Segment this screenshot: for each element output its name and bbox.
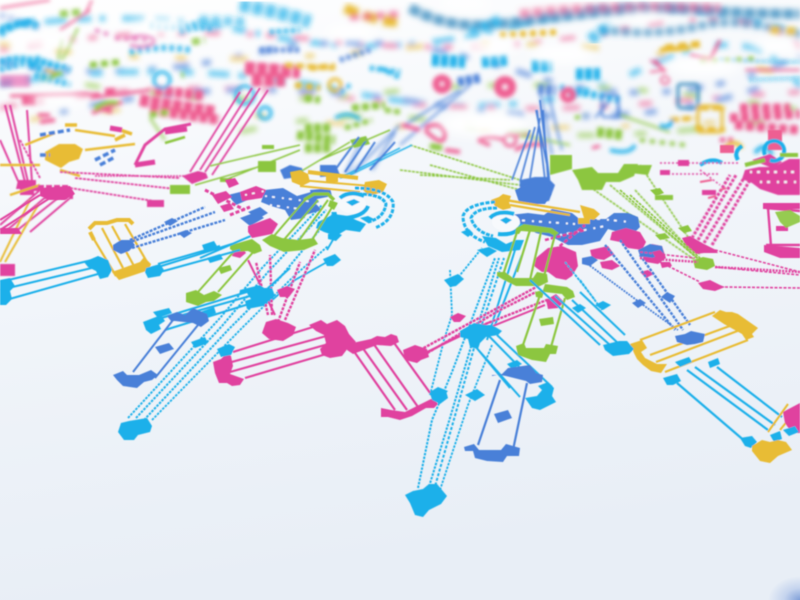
upper mid network, blurred [0, 0, 800, 175]
foreground network [0, 170, 800, 517]
paper shadow at corner [600, 450, 800, 600]
distant network, far blurred band [0, 5, 800, 40]
near-middle network [0, 88, 800, 276]
left hub block cluster [205, 178, 332, 238]
green rectangle centre-lower [516, 284, 575, 362]
cyan rectangle lower right [663, 357, 782, 448]
magenta strands to right of rect B [403, 285, 564, 363]
yellow rectangle right hub [491, 194, 600, 224]
green rectangle at left hub [262, 194, 338, 252]
yellow rectangle at left hub [290, 170, 387, 196]
magenta rectangle B [347, 334, 448, 420]
blue dotted strands to terminal [113, 207, 225, 254]
cap between strands [262, 319, 296, 341]
green rectangle left [186, 239, 262, 306]
white paper gaps between distant clusters [5, 0, 800, 136]
far-left magenta rectangle [0, 186, 75, 234]
right hub block cluster [510, 182, 672, 280]
left hub cyan rings [316, 188, 393, 241]
cyan rectangle right connection [530, 280, 634, 356]
cyan rectangle centre [460, 323, 556, 410]
magenta strands to rect [256, 250, 315, 322]
yellow terminal lower right [752, 403, 800, 463]
blue rectangle centre [464, 365, 543, 462]
blue rectangle left [113, 308, 209, 388]
right magenta hub and dotted strands [620, 188, 800, 291]
yellow rectangle right [630, 310, 758, 373]
green rectangle right hub [497, 224, 559, 286]
magenta rectangle far right [763, 203, 800, 258]
cyan rectangle behind blue [143, 268, 290, 348]
cyan rectangle far left [0, 256, 112, 305]
cyan dotted strands, left group [118, 205, 341, 440]
right hub cyan rings [461, 202, 524, 257]
cyan rectangle center-left [145, 232, 260, 278]
yellow rectangle left [89, 220, 151, 280]
cyan strands centre to big blob [405, 248, 522, 517]
magenta rectangle A [213, 320, 356, 386]
blue dotted strands to right terminal [565, 240, 690, 330]
pastel wash of distant network [0, 7, 800, 135]
